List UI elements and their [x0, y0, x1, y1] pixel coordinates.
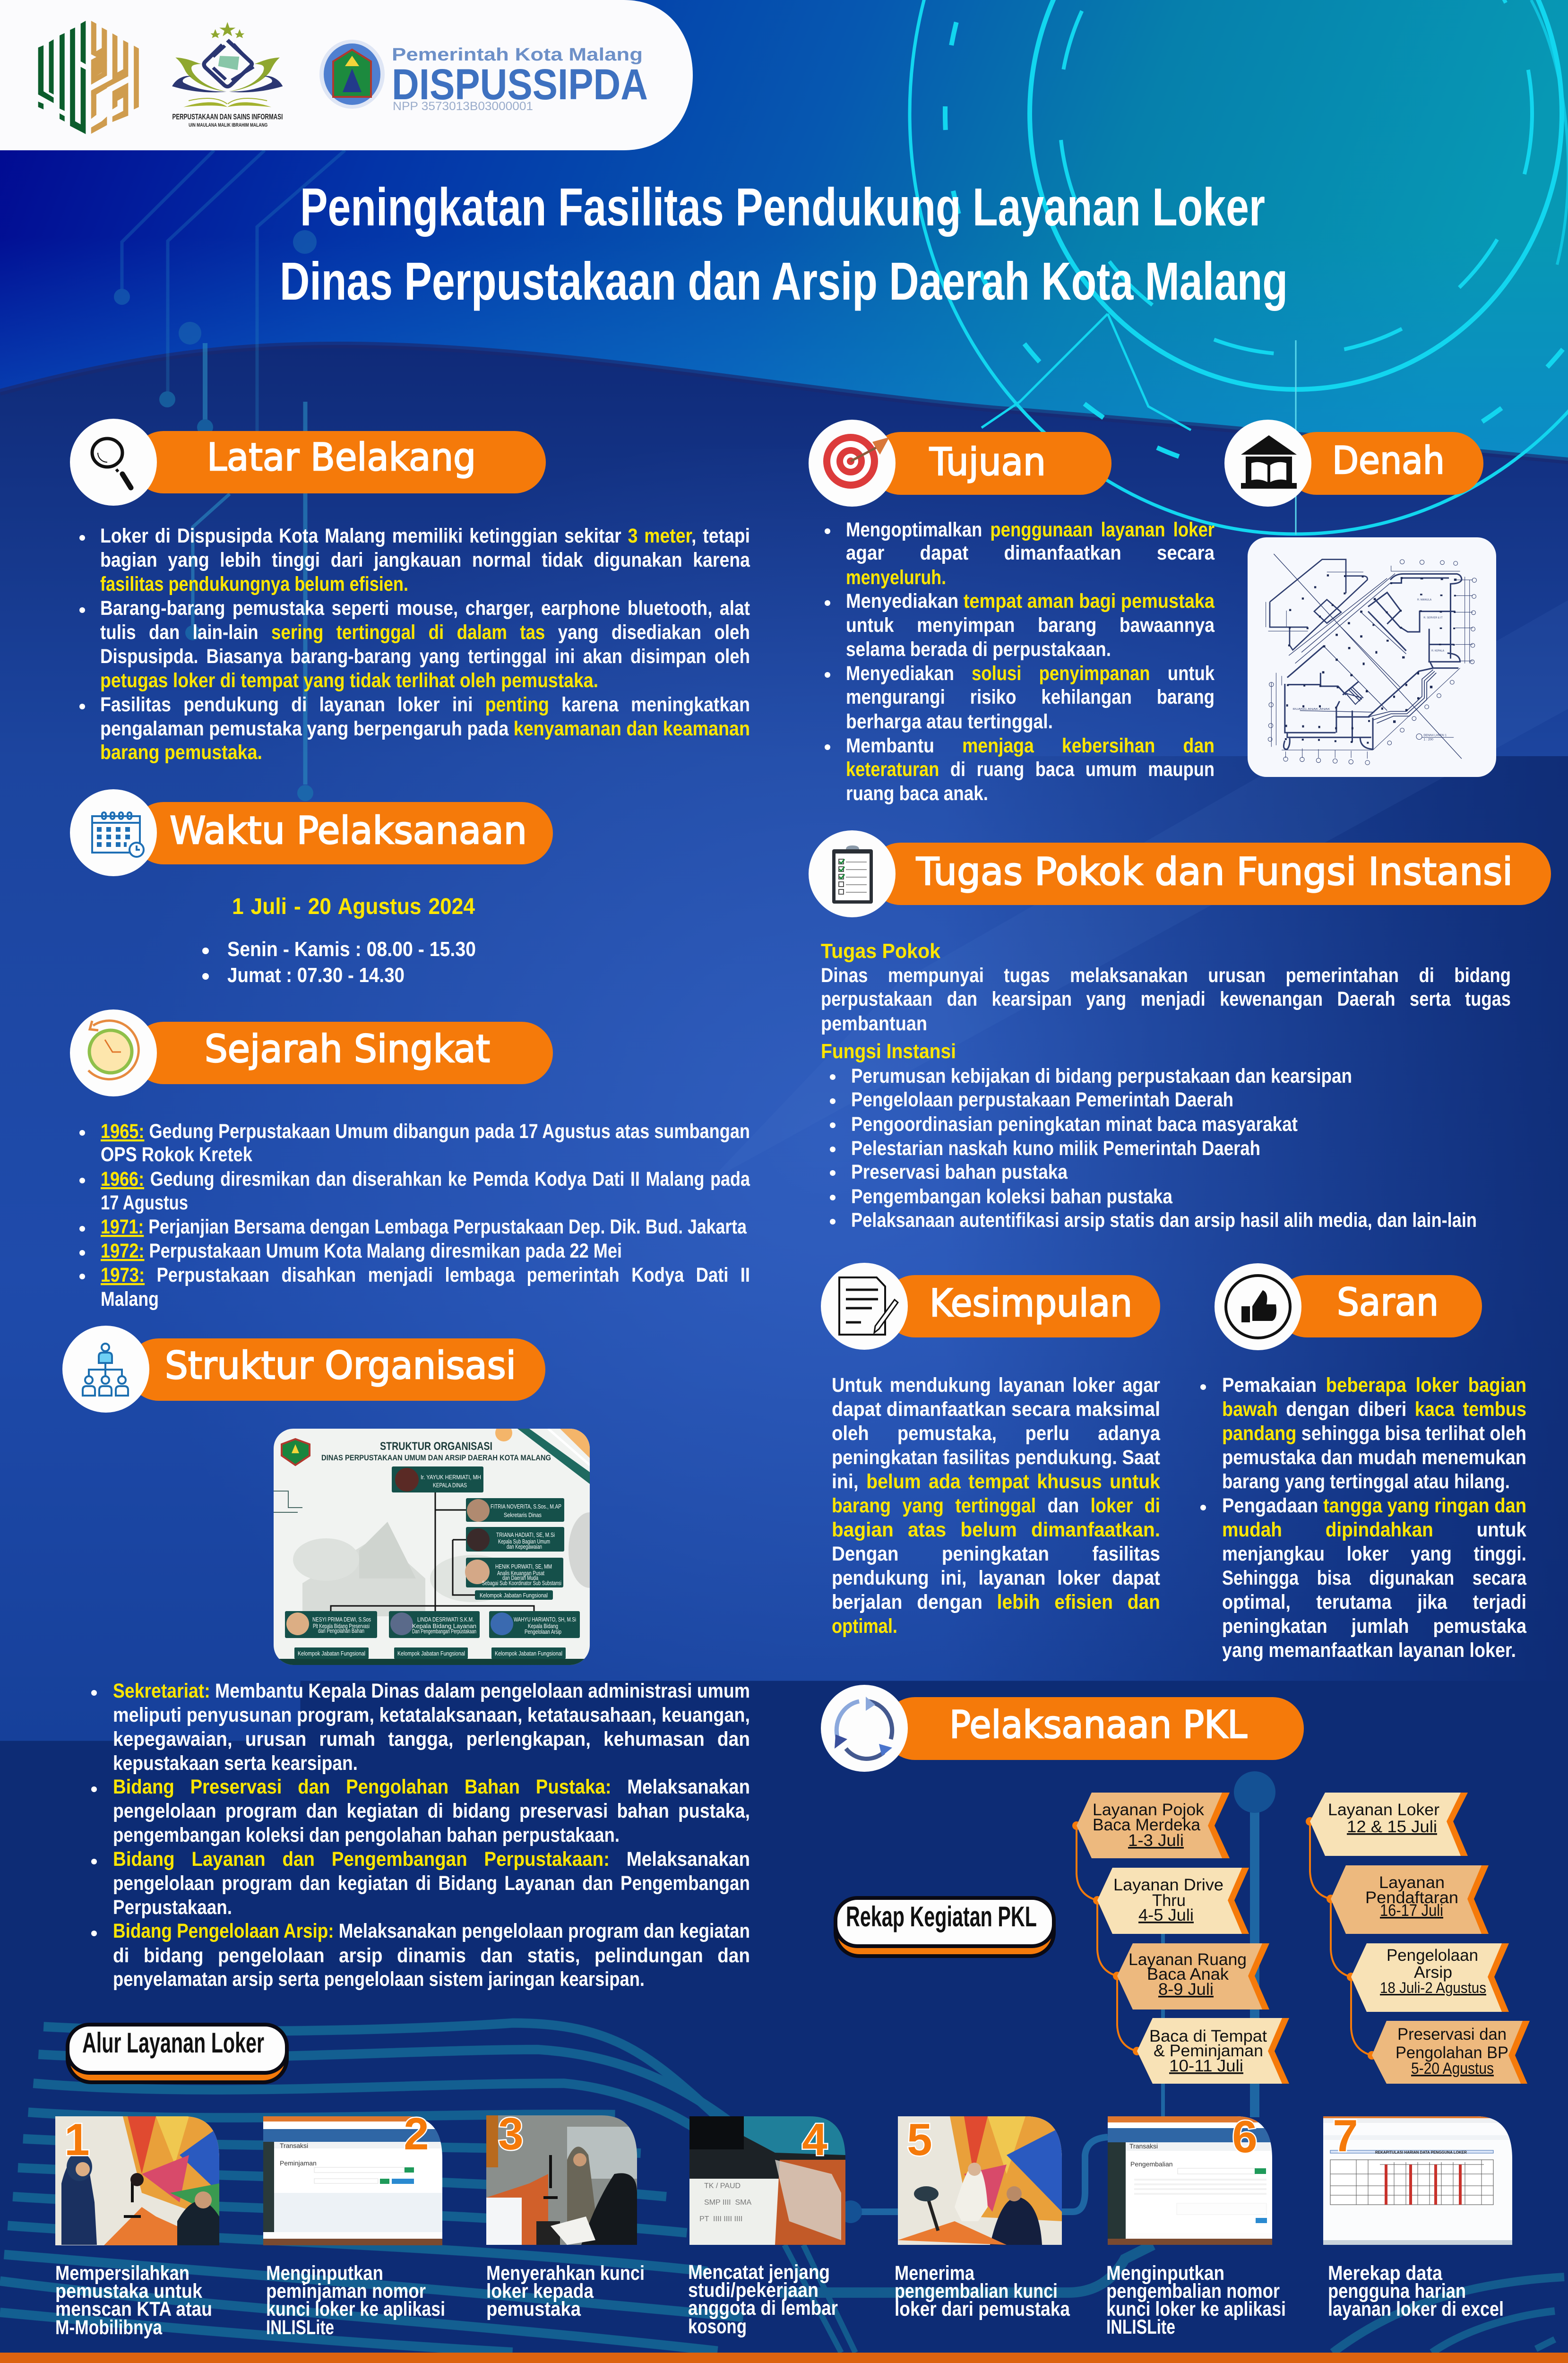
chevron: pengelolaan arsip: Arsip [1414, 1963, 1452, 1982]
text block: tujuan: keteraturan di ruang baca umum maupun [846, 758, 1215, 781]
heading: struktur organisasi [62, 1326, 545, 1413]
step 2 caption: INLISLite [266, 2316, 334, 2339]
heading: tujuan [809, 420, 1111, 507]
org chart image: Kelompok Jabatan Fungsional [495, 1650, 562, 1657]
org chart image: Kelompok Jabatan Fungsional [397, 1650, 465, 1657]
text block: struktur: meliputi penyusunan program, ketatalaksanaan, ketatausahaan, keuangan, [113, 1704, 750, 1726]
chevron: pendaftaran: 16-17 Juli [1380, 1901, 1443, 1920]
text block: tujuan: ruang baca anak. [846, 782, 988, 805]
step 7 spreadsheet screenshot [1323, 2111, 1512, 2245]
logo: dispussipda: Pemerintah Kota Malang [392, 45, 643, 65]
text block: latar belakang: Barang-barang pemustaka seperti mouse, charger, earphone bluetooth, alat [100, 597, 750, 620]
step 7 spreadsheet screenshot: 7 [1333, 2111, 1358, 2161]
floor plan image: DENAH LANTAI 1 [1423, 734, 1447, 737]
text block: struktur: di bidang pengelolaan arsip dinamis dan statis, pelindungan dan [113, 1944, 750, 1967]
floor plan image: RUANG ANAK-ANAK [1293, 708, 1330, 711]
chevron: pendaftaran: Layanan [1379, 1873, 1445, 1892]
step 5 caption: loker dari pemustaka [895, 2298, 1070, 2320]
panel: tujuan [803, 416, 1219, 808]
chevron: drive thru: Layanan Drive [1113, 1876, 1223, 1894]
logo: kufi emblem [38, 21, 139, 134]
text block: kesimpulan: bagian atas belum dimanfaatkan. [832, 1518, 1160, 1541]
text block: latar belakang: bagian yang lebih tinggi dari jangkauan normal tidak digunakan karena [100, 549, 750, 571]
text block: tujuan: selama berada di perpustakaan. [846, 638, 1111, 661]
chevron: layanan loker: 12 & 15 Juli [1347, 1818, 1437, 1836]
text block: saran: optimal, terutama jika terjadi [1222, 1591, 1526, 1613]
text block: sejarah: 1965: Gedung Perpustakaan Umum dibangun pada 17 Agustus atas sumbangan [101, 1120, 750, 1143]
button: alur layanan loker [68, 2025, 287, 2082]
text block: tujuan: menyeluruh. [846, 566, 946, 589]
chevron: ruang baca anak: Baca Anak [1147, 1965, 1229, 1984]
icon: document and pencil [839, 1277, 898, 1335]
text block: struktur: penyelamatan arsip serta pengelolaan sistem jaringan kearsipan. [113, 1968, 645, 1991]
heading: pelaksanaan pkl [821, 1685, 1304, 1772]
text block: latar belakang [79, 525, 750, 764]
logo: perpustakaan dan sains informasi: PERPUSTAKAAN DAN SAINS INFORMASI [172, 112, 283, 121]
step 7 spreadsheet screenshot: REKAPITULASI HARIAN DATA PENGGUNA LOKER [1375, 2150, 1467, 2155]
text block: kesimpulan: ini, belum ada tempat khusus untuk [832, 1470, 1160, 1493]
chevron: baca di tempat [1137, 2018, 1289, 2084]
text block: latar belakang: Fasilitas pendukung di layanan loker ini penting karena meningkatkan [100, 693, 750, 716]
org chart image: Analis Keuangan Pusat [497, 1570, 544, 1577]
text block: struktur: Bidang Preservasi dan Pengolahan Bahan Pustaka: Melaksanakan [113, 1776, 750, 1798]
text: fungsi instansi: Pengembangan koleksi bahan pustaka [851, 1185, 1173, 1208]
org chart image: TRIANA HADIATI, SE, M.Si [496, 1531, 555, 1538]
panel: latar belakang [66, 416, 756, 766]
text block: struktur: pengelolaan program dan kegiatan di Bidang Layanan dan Pengembangan [113, 1872, 750, 1895]
org chart image: dan Kepegawaian [507, 1543, 542, 1550]
step 7 caption: layanan loker di excel [1328, 2298, 1504, 2320]
title: Peningkatan Fasilitas Pendukung Layanan Loker [300, 177, 1265, 237]
org chart image: WAHYU HARIANTO, SH, M.Si [514, 1616, 576, 1623]
step 4 photo [689, 2114, 845, 2245]
floor plan image [1248, 537, 1496, 777]
text: fungsi instansi [821, 1040, 1477, 1232]
org chart image: FITRIA NOVERITA, S.Sos., M.AP [491, 1503, 561, 1510]
chevron: preservasi: Preservasi dan [1397, 2025, 1507, 2044]
heading: sejarah singkat [70, 1009, 553, 1096]
step 4 photo: PT IIII IIII IIII [699, 2215, 742, 2223]
text: fungsi instansi: Fungsi Instansi [821, 1040, 956, 1063]
text: fungsi instansi: Pengoordinasian peningkatan minat baca masyarakat [851, 1113, 1298, 1136]
heading: pelaksanaan pkl: Pelaksanaan PKL [949, 1703, 1247, 1747]
text: tugas pokok [821, 940, 1511, 1035]
step 2 screenshot [263, 2109, 442, 2245]
text block: sejarah [79, 1120, 750, 1311]
text block: struktur: Bidang Pengelolaan Arsip: Melaksanakan pengelolaan program dan kegiatan [113, 1920, 750, 1942]
chevron: preservasi: 5-20 Agustus [1411, 2060, 1494, 2078]
text block: kesimpulan [832, 1374, 1161, 1638]
icon: cycle arrows [835, 1697, 892, 1759]
step 6 caption [1106, 2262, 1286, 2338]
icon: library house [1241, 435, 1297, 489]
text block: tujuan: Menyediakan solusi penyimpanan untuk [846, 662, 1215, 685]
logo: dispussipda: NPP 3573013B03000001 [393, 100, 533, 113]
text block: sejarah: Malang [101, 1288, 159, 1311]
panel: waktu pelaksanaan [66, 785, 558, 992]
text block: tujuan: Menyediakan tempat aman bagi pemustaka [846, 590, 1215, 612]
step 3 photo: 3 [498, 2109, 524, 2159]
org chart image: Ir. YAYUK HERMIATI, MH [421, 1474, 481, 1481]
step 4 caption: anggota di lembar [688, 2297, 838, 2320]
panel: sejarah singkat [66, 1007, 756, 1314]
chevron: pendaftaran [1331, 1865, 1489, 1934]
text: fungsi instansi: Pelestarian naskah kuno milik Pemerintah Daerah [851, 1137, 1260, 1160]
button: rekap kegiatan pkl: Rekap Kegiatan PKL [846, 1901, 1037, 1932]
schedule list [202, 938, 476, 987]
step 5 photo [898, 2114, 1062, 2245]
text block: struktur: kepustakaan serta kearsipan. [113, 1752, 358, 1775]
logo: perpustakaan dan sains informasi [172, 22, 283, 128]
heading: waktu pelaksanaan: Waktu Pelaksanaan [170, 809, 527, 853]
icon: org hierarchy [83, 1344, 128, 1396]
chevron: ruang baca anak: Layanan Ruang [1129, 1950, 1247, 1969]
schedule list: Jumat : 07.30 - 14.30 [227, 964, 405, 987]
chevron: preservasi: Pengolahan BP [1396, 2044, 1508, 2062]
chevron: layanan loker: Layanan Loker [1328, 1801, 1439, 1819]
text block: saran: bawah dengan diberi kaca tembus [1222, 1398, 1526, 1421]
step 6 screenshot: Pengembalian [1130, 2160, 1173, 2168]
logo: perpustakaan dan sains informasi: UIN MAULANA MALIK IBRAHIM MALANG [189, 122, 267, 128]
org chart image: KEPALA DINAS [433, 1482, 467, 1489]
step 4 photo: 4 [802, 2114, 827, 2165]
heading: sejarah singkat: Sejarah Singkat [205, 1027, 490, 1071]
step 3 caption: pemustaka [486, 2298, 581, 2320]
step 7 caption: pengguna harian [1328, 2280, 1466, 2303]
org chart image: Kepala Sub Bagian Umum [498, 1538, 550, 1545]
text block: latar belakang: pengalaman pemustaka yang berpengaruh pada kenyamanan dan keamanan [100, 717, 750, 740]
text block: kesimpulan: Untuk mendukung layanan loker agar [832, 1374, 1160, 1397]
heading: tujuan: Tujuan [929, 440, 1046, 484]
org chart image: Plt Kepala Bidang Preservasi [313, 1622, 370, 1630]
step 6 screenshot: 6 [1232, 2112, 1258, 2162]
text: fungsi instansi: Perumusan kebijakan di bidang perpustakaan dan kearsipan [851, 1065, 1352, 1087]
step 1 caption: pemustaka untuk [55, 2280, 202, 2303]
heading: latar belakang [70, 419, 546, 506]
org chart image: DINAS PERPUSTAKAAN UMUM DAN ARSIP DAERAH KOTA MALANG [321, 1453, 551, 1462]
step 4 caption: Mencatat jenjang [688, 2261, 830, 2284]
heading: denah: Denah [1332, 439, 1445, 483]
title [265, 175, 1304, 317]
button: alur layanan loker: Alur Layanan Loker [82, 2027, 264, 2059]
org chart image: Kepala Bidang [528, 1622, 558, 1630]
text: fungsi instansi: Preservasi bahan pustaka [851, 1161, 1068, 1183]
step 2 caption: peminjaman nomor [266, 2280, 426, 2303]
text block: latar belakang: petugas loker di tempat yang tidak terlihat oleh pemustaka. [100, 669, 598, 692]
chevron: baca di tempat: Baca di Tempat [1149, 2027, 1267, 2045]
heading: waktu pelaksanaan [70, 789, 553, 876]
heading: struktur organisasi: Struktur Organisasi [165, 1344, 516, 1388]
step 3 caption: loker kepada [486, 2280, 594, 2303]
text block: kesimpulan: optimal. [832, 1615, 897, 1638]
logo: dispussipda: DISPUSSIPDA [392, 60, 648, 109]
icon: clock [88, 1021, 138, 1079]
step 4 caption: studi/pekerjaan [688, 2279, 818, 2302]
schedule list: Senin - Kamis : 08.00 - 15.30 [227, 938, 476, 961]
text block: tujuan: Membantu menjaga kebersihan dan [846, 734, 1215, 757]
panel: pelaksanaan pkl [818, 1682, 1536, 2089]
step 1 photo [55, 2114, 219, 2245]
step 1 photo: 1 [64, 2114, 90, 2165]
org chart image: dan Daerah Muda [502, 1574, 539, 1581]
org chart image: LINDA DESRIWATI S.K.M. [417, 1616, 474, 1623]
text block: kesimpulan: peningkatan fasilitas pendukung. Saat [832, 1446, 1160, 1469]
chevron: baca di tempat: & Peminjaman [1154, 2042, 1263, 2060]
text block: latar belakang: Dispusipda. Biasanya barang-barang yang tertinggal ini akan disimpan oleh [100, 645, 750, 668]
step 3 caption: Menyerahkan kunci [486, 2262, 645, 2285]
panel: struktur organisasi [61, 1323, 756, 1994]
text block: saran: menjangkau loker yang tinggi. [1222, 1543, 1526, 1565]
chevron: pojok baca: Baca Merdeka [1093, 1816, 1201, 1834]
text block: kesimpulan: Dengan peningkatan fasilitas [832, 1543, 1160, 1565]
chevron: layanan loker [1310, 1793, 1468, 1856]
step 6 screenshot [1108, 2112, 1272, 2245]
text block: saran: mudah dipindahkan untuk [1222, 1518, 1526, 1541]
icon: thumbs up [1226, 1276, 1290, 1338]
chevron: pojok baca: 1-3 Juli [1128, 1831, 1184, 1850]
org chart image: STRUKTUR ORGANISASI [380, 1440, 492, 1453]
step 1 caption: menscan KTA atau [55, 2298, 212, 2320]
text block: sejarah: 1971: Perjanjian Bersama dengan Lembaga Perpustakaan Dep. Dik. Bud. Jakarta [101, 1216, 747, 1238]
heading: saran: Saran [1337, 1280, 1439, 1324]
step 6 caption: Menginputkan [1106, 2262, 1224, 2285]
icon: calendar [92, 812, 144, 857]
floor plan image: 1 : 200 [1423, 738, 1433, 741]
step 4 photo: SMP IIII SMA [704, 2199, 751, 2207]
org chart image [274, 1424, 611, 1665]
chevron: preservasi [1372, 2021, 1530, 2084]
text block: saran: peningkatan jumlah pemustaka [1222, 1615, 1527, 1638]
step 2 caption [266, 2262, 445, 2339]
step 5 caption: Menerima [895, 2262, 975, 2285]
text: fungsi instansi: Pengelolaan perpustakaan Pemerintah Daerah [851, 1088, 1233, 1111]
step 6 caption: INLISLite [1106, 2316, 1175, 2338]
heading: kesimpulan: Kesimpulan [930, 1281, 1132, 1325]
text block: struktur: pengelolaan program dan kegiatan di bidang preservasi bahan pustaka, [113, 1800, 750, 1822]
step 5 caption [895, 2262, 1070, 2320]
step 5 caption: pengembalian kunci [895, 2280, 1058, 2303]
text block: sejarah: 1966: Gedung diresmikan dan diserahkan ke Pemda Kodya Dati II Malang pada [101, 1168, 750, 1190]
date range: 1 Juli - 20 Agustus 2024 [232, 894, 475, 919]
floor plan image: R. SERVER & IT [1423, 617, 1443, 620]
step 4 caption: kosong [688, 2315, 747, 2338]
text block: sejarah: OPS Rokok Kretek [101, 1143, 252, 1166]
text block: saran: pandang sehingga bisa terlihat oleh [1222, 1422, 1526, 1445]
text block: tujuan: mengurangi risiko kehilangan barang [846, 686, 1215, 708]
org chart image: Sebagai Sub Koordinator Sub Substansi [482, 1579, 561, 1587]
step 5 photo: 5 [907, 2114, 932, 2165]
floor plan image: R. MANULA [1417, 598, 1431, 601]
text block: kesimpulan: berjalan dengan lebih efisien dan [832, 1591, 1160, 1613]
text block: struktur: pengembangan koleksi dan pengolahan bahan perpustakaan. [113, 1824, 620, 1846]
panel: alur layanan loker [47, 2018, 1522, 2339]
panel: denah [1224, 416, 1503, 785]
text block: saran: Pengadaan tangga yang ringan dan [1222, 1494, 1526, 1517]
heading: tugas pokok [809, 830, 1551, 917]
text block: kesimpulan: barang yang tertinggal dan loker di [832, 1494, 1160, 1517]
text block: tujuan: berharga atau tertinggal. [846, 710, 1053, 733]
org chart image: Pengelolaan Arsip [525, 1628, 561, 1635]
text block: tujuan: Mengoptimalkan penggunaan layanan loker [846, 518, 1215, 541]
text block: sejarah: 1973: Perpustakaan disahkan menjadi lembaga pemerintah Kodya Dati II [101, 1264, 750, 1286]
chevron: pengelolaan arsip: Pengelolaan [1387, 1946, 1478, 1965]
org chart image: dan Pengolahan Bahan [318, 1627, 364, 1634]
chevron: ruang baca anak: 8-9 Juli [1158, 1980, 1214, 1999]
text block: sejarah: 17 Agustus [101, 1191, 188, 1214]
chevron: ruang baca anak [1117, 1943, 1269, 2009]
org chart image: Kelompok Jabatan Fungsional [298, 1650, 365, 1657]
heading: kesimpulan [821, 1263, 1160, 1350]
icon: clipboard [832, 845, 873, 904]
footer name band [0, 2353, 1568, 2363]
org chart image: Kelompok Jabatan Fungsional [480, 1592, 548, 1599]
text block: latar belakang: tulis dan lain-lain sering tertinggal di dalam tas yang disediakan oleh [100, 621, 750, 644]
step 7 caption [1328, 2262, 1504, 2320]
chevron: pengelolaan arsip: 18 Juli-2 Agustus [1380, 1979, 1486, 1996]
panel: saran [1196, 1257, 1536, 1664]
text block: sejarah: 1972: Perpustakaan Umum Kota Malang diresmikan pada 22 Mei [101, 1240, 622, 1262]
text block: saran: barang yang tertinggal atau hilang. [1222, 1470, 1510, 1493]
chevron: pojok baca: Layanan Pojok [1093, 1801, 1204, 1819]
chevron: pojok baca [1077, 1793, 1230, 1858]
step 3 caption [486, 2262, 645, 2320]
text block: latar belakang: fasilitas pendukungnya belum efisien. [100, 573, 408, 595]
text block: struktur: Perpustakaan. [113, 1896, 232, 1919]
chevron: baca di tempat: 10-11 Juli [1169, 2057, 1243, 2075]
org chart image: Kepala Bidang Layanan [412, 1622, 476, 1630]
step 2 screenshot: 2 [404, 2109, 429, 2159]
org chart image: Dan Pengembangan Perpustakaan [412, 1628, 476, 1635]
text block: struktur: kepegawaian, urusan rumah tangga, perlengkapan, kehumasan dan [113, 1728, 750, 1751]
heading: saran [1215, 1263, 1482, 1350]
step 2 caption: kunci loker ke aplikasi [266, 2298, 445, 2320]
text block: kesimpulan: oleh pemustaka, perlu adanya [832, 1422, 1161, 1445]
floor plan image: R. KEPALA [1431, 650, 1444, 653]
chevron: drive thru [1097, 1868, 1249, 1934]
text block: latar belakang: Loker di Dispusipda Kota Malang memiliki ketinggian sekitar 3 meter, tetapi [100, 525, 750, 547]
text block: tujuan [825, 518, 1215, 805]
panel: kesimpulan [818, 1257, 1167, 1640]
text block: kesimpulan: pendukung ini, layanan loker dapat [832, 1567, 1160, 1589]
logo: dispussipda [319, 40, 648, 113]
title: Dinas Perpustakaan dan Arsip Daerah Kota Malang [280, 251, 1288, 311]
text block: tujuan: untuk menyimpan barang bawaannya [846, 614, 1215, 637]
text block: saran: pemustaka dan mudah menemukan [1222, 1446, 1526, 1469]
heading: denah [1224, 420, 1483, 507]
step 1 caption: M-Mobilibnya [55, 2316, 163, 2339]
text block: saran: yang memanfaatkan layanan loker. [1222, 1639, 1516, 1662]
step 2 screenshot: Peminjaman [280, 2159, 317, 2167]
step 4 caption [688, 2261, 838, 2338]
heading: tugas pokok: Tugas Pokok dan Fungsi Instansi [916, 850, 1513, 894]
step 2 screenshot: Transaksi [280, 2142, 308, 2149]
step 3 photo [486, 2109, 637, 2245]
chevron: drive thru: Thru [1152, 1891, 1186, 1910]
heading: latar belakang: Latar Belakang [207, 435, 476, 479]
text block: latar belakang: barang pemustaka. [100, 741, 262, 764]
step 1 caption [55, 2262, 212, 2339]
org chart image: NESYI PRIMA DEWI, S.Sos [312, 1616, 371, 1623]
button: rekap kegiatan pkl [836, 1898, 1054, 1956]
panel: tugas pokok dan fungsi instansi [803, 827, 1559, 1233]
org chart image: HENIK PURWATI, SE, MM [495, 1563, 552, 1570]
step 1 caption: Mempersilahkan [55, 2262, 190, 2285]
step 7 caption: Merekap data [1328, 2262, 1443, 2285]
chevron: pengelolaan arsip [1351, 1943, 1509, 2012]
header logo panel [0, 0, 699, 156]
icon: target [823, 434, 889, 489]
org chart image: Sekretaris Dinas [504, 1511, 542, 1518]
step 4 photo: TK / PAUD [704, 2182, 741, 2190]
connector lines [1073, 1818, 1375, 2059]
step 6 caption: kunci loker ke aplikasi [1106, 2298, 1286, 2320]
text: tugas pokok: Tugas Pokok [821, 940, 940, 963]
chevron: drive thru: 4-5 Juli [1138, 1906, 1194, 1924]
text block: struktur [91, 1680, 750, 1991]
step 6 caption: pengembalian nomor [1106, 2280, 1280, 2303]
text block: kesimpulan: dapat dimanfaatkan secara maksimal [832, 1398, 1160, 1421]
text: tugas pokok: pembantuan [821, 1012, 927, 1035]
text block: saran: Pemakaian beberapa loker bagian [1222, 1374, 1526, 1397]
step 2 caption: Menginputkan [266, 2262, 383, 2285]
text block: saran [1200, 1374, 1527, 1662]
text block: struktur: Sekretariat: Membantu Kepala Dinas dalam pengelolaan administrasi umum [113, 1680, 750, 1702]
text block: struktur: Bidang Layanan dan Pengembangan Perpustakaan: Melaksanakan [113, 1848, 750, 1871]
chevron: pendaftaran: Pendaftaran [1365, 1889, 1458, 1907]
text block: tujuan: agar dapat dimanfaatkan secara [846, 542, 1215, 564]
icon: magnifier [92, 439, 131, 488]
step 6 screenshot: Transaksi [1129, 2142, 1158, 2150]
